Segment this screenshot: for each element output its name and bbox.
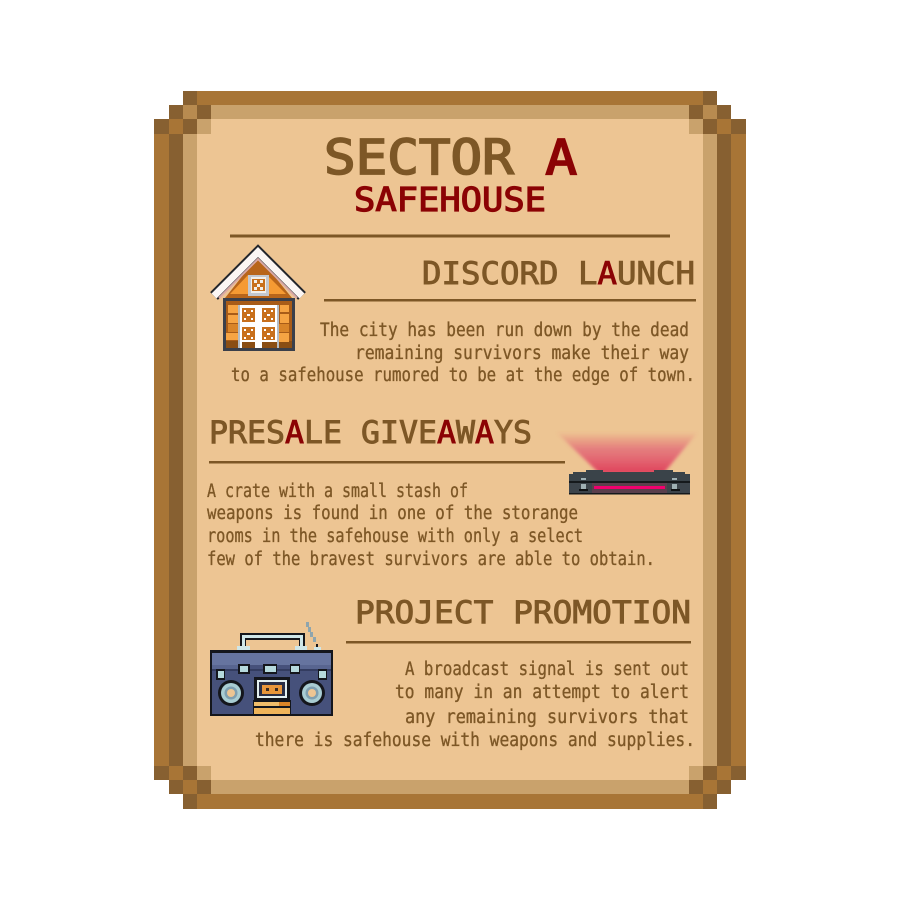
text block: presale giveaways: rooms in the safehouse with only a select — [207, 526, 583, 547]
text block: discord launch: to a safehouse rumored to be at the edge of town. — [231, 365, 695, 386]
text block: project promotion: any remaining survivors that — [405, 707, 689, 728]
text block: presale giveaways: few of the bravest survivors are able to obtain. — [207, 549, 655, 570]
text block: project promotion — [255, 659, 695, 751]
text block: project promotion: to many in an attempt to alert — [395, 682, 689, 703]
subtitle: SAFEHOUSE — [354, 180, 546, 219]
text block: discord launch: remaining survivors make their way — [355, 343, 689, 364]
heading: discord launch: DISCORD LAUNCH — [422, 256, 695, 292]
icon: glowing weapons crate — [556, 432, 698, 494]
panel: pixel frame — [154, 91, 746, 809]
heading: project promotion: PROJECT PROMOTION — [355, 595, 691, 631]
icon: boombox — [210, 622, 333, 716]
icon: boombox speakers — [218, 680, 325, 706]
text block: presale giveaways: weapons is found in one of the storange — [207, 503, 578, 524]
heading: presale giveaways: PRESALE GIVEAWAYS — [209, 415, 532, 451]
text block: discord launch — [231, 320, 695, 386]
text block: presale giveaways — [207, 481, 655, 570]
icon: wooden house — [214, 252, 302, 351]
text block: discord launch: The city has been run down by the dead — [320, 320, 689, 341]
text block: presale giveaways: A crate with a small stash of — [207, 481, 468, 502]
title: SECTOR A — [324, 130, 577, 186]
text block: project promotion: there is safehouse with weapons and supplies. — [255, 730, 695, 751]
text block: project promotion: A broadcast signal is sent out — [405, 659, 689, 680]
